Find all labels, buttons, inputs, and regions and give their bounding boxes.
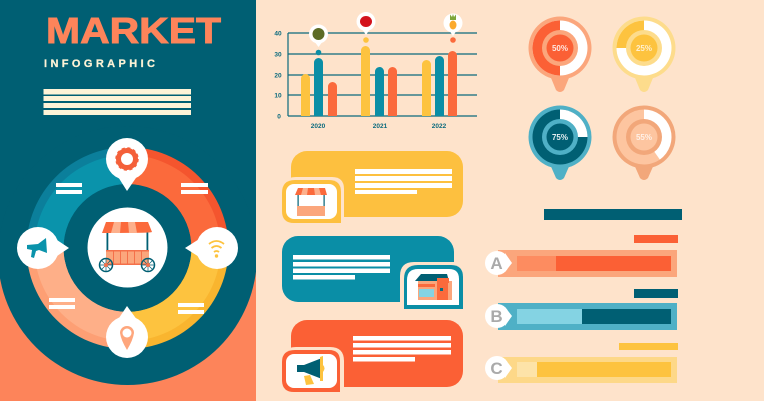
card text lines	[353, 336, 451, 362]
chart: 25% pin: 25%	[636, 44, 652, 53]
axis labels: 20	[274, 72, 282, 80]
marker: avocado	[309, 24, 328, 55]
bars 2020	[301, 58, 337, 116]
text block: header lines	[44, 89, 191, 115]
chart: 75% pin: 75%	[552, 133, 568, 142]
panel: left market panel	[0, 0, 257, 401]
grid lines and axes	[288, 33, 477, 116]
icon: megaphone	[282, 347, 344, 392]
axis labels: 2020	[311, 123, 326, 130]
chart: 50% pin: 50%	[552, 44, 568, 53]
axis labels: 30	[274, 52, 282, 58]
icon: gear pin	[106, 138, 148, 191]
heading bar	[544, 209, 682, 220]
card text lines	[293, 255, 390, 280]
bars 2022	[422, 51, 457, 116]
bars 2021	[361, 46, 397, 116]
icon: location pin	[106, 306, 148, 358]
icon: market stall	[282, 177, 344, 223]
row A	[485, 235, 678, 277]
marker: apple	[356, 12, 376, 43]
icon: wifi pin	[185, 227, 238, 269]
subtitle: INFOGRAPHIC	[44, 58, 155, 70]
panel: orange card	[282, 320, 463, 392]
axis labels: 10	[274, 92, 282, 100]
segment: peach	[26, 248, 128, 349]
chart: 25% pin	[612, 16, 676, 92]
segment: yellow	[128, 248, 228, 349]
chart: 75% pin	[528, 106, 592, 180]
icon: market cart	[88, 208, 168, 288]
icon: megaphone pin	[17, 227, 69, 269]
chart: 50% pin	[528, 16, 592, 92]
marker: pineapple	[444, 14, 462, 43]
row C	[485, 343, 678, 383]
segment: teal	[26, 147, 128, 248]
chart: donut ring	[26, 147, 228, 349]
axis labels: 0	[277, 114, 281, 120]
row B: B	[490, 307, 503, 326]
segment: red-orange	[128, 147, 228, 248]
axis labels	[274, 30, 447, 130]
chart: 55% pin	[612, 106, 676, 180]
chart: 55% pin: 55%	[636, 133, 652, 142]
icon: shop	[400, 262, 463, 309]
axis labels: 2021	[373, 123, 388, 130]
row A: A	[490, 254, 503, 273]
axis labels: 2022	[432, 123, 447, 130]
title: MARKET	[46, 10, 221, 51]
ring text lines	[49, 183, 208, 314]
row C: C	[490, 359, 503, 378]
card text lines	[355, 169, 452, 194]
panel: teal card	[282, 236, 463, 309]
bar chart	[274, 12, 477, 130]
panel: yellow card	[282, 151, 463, 223]
axis labels: 40	[274, 30, 282, 38]
row B	[485, 289, 678, 330]
